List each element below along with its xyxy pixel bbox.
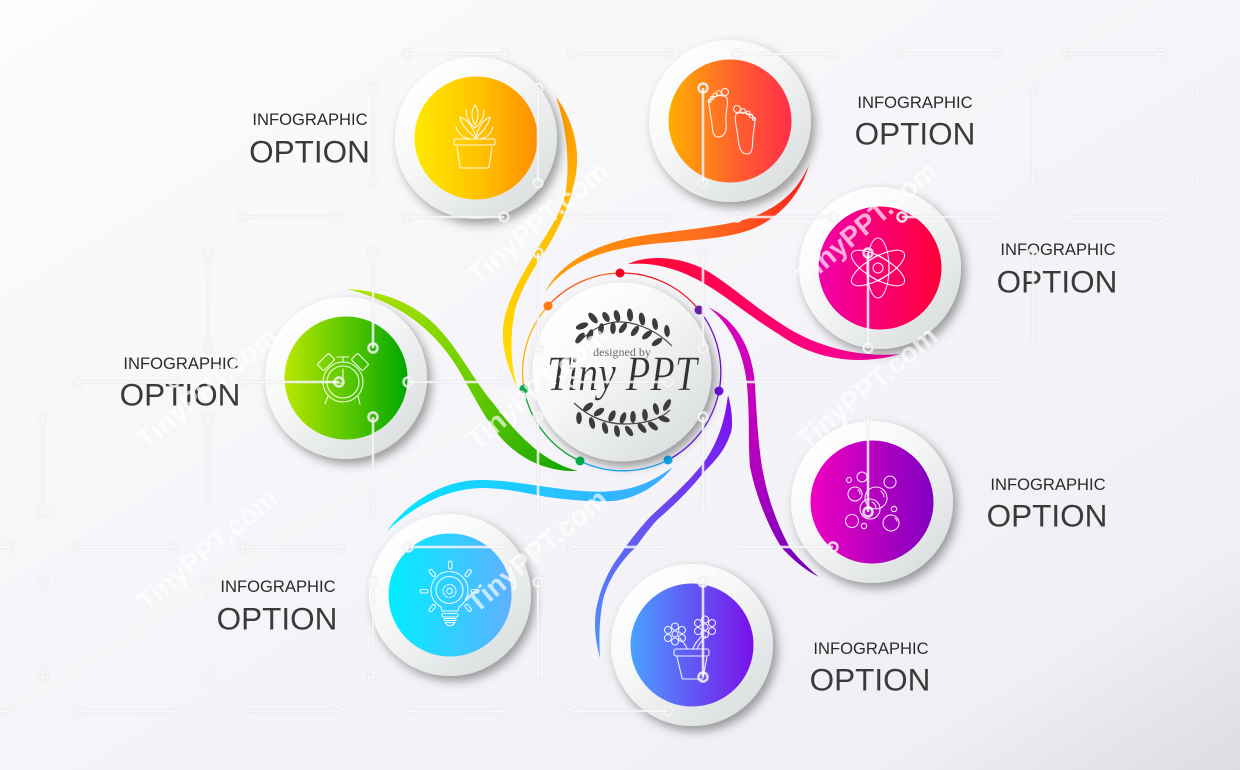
label: cyan <box>217 577 337 636</box>
icon: light bulb with gear <box>420 561 479 626</box>
logo: bottom laurel <box>574 398 673 438</box>
node: yellow plant <box>395 57 557 219</box>
label: green <box>120 354 240 412</box>
label: orange <box>855 93 975 152</box>
ribbon: pink <box>628 258 900 360</box>
label: yellow <box>249 110 370 170</box>
watermarks: TinyPPT.com <box>460 483 613 618</box>
logo: TinyPPT script: Tiny PPT <box>547 346 699 401</box>
ribbon: cyan <box>387 467 673 531</box>
watermarks: TinyPPT.com <box>461 155 614 290</box>
hub ring with dots <box>520 268 724 471</box>
label: green: INFOGRAPHIC <box>123 354 239 373</box>
label: yellow: OPTION <box>249 134 370 170</box>
watermarks: TinyPPT.com <box>460 320 613 455</box>
watermarks: TinyPPT.com <box>130 482 283 617</box>
watermarks: TinyPPT.com <box>130 320 283 455</box>
logo: top laurel <box>574 308 672 348</box>
label: purple: OPTION <box>987 498 1107 534</box>
icon: potted plant <box>454 105 495 168</box>
ribbon: violet <box>595 395 732 658</box>
label: pink <box>997 240 1117 300</box>
node: purple bubbles <box>791 421 953 583</box>
label: pink: OPTION <box>997 264 1117 300</box>
label: orange: INFOGRAPHIC <box>857 93 973 112</box>
icon: alarm clock <box>317 353 369 404</box>
ribbon: orange <box>545 165 809 292</box>
node: orange feet <box>649 40 811 202</box>
label: violet: INFOGRAPHIC <box>813 639 929 658</box>
label: purple: INFOGRAPHIC <box>990 475 1106 494</box>
ribbon: yellow <box>503 97 577 388</box>
ribbon: green <box>347 289 578 471</box>
label: purple <box>987 475 1107 534</box>
label: yellow: INFOGRAPHIC <box>252 110 368 129</box>
ribbon: purple <box>708 307 819 577</box>
node: cyan bulb <box>369 514 531 676</box>
icon: flower pot <box>664 616 716 679</box>
node: green clock <box>265 297 427 459</box>
watermarks: TinyPPT.com <box>790 155 943 290</box>
label: orange: OPTION <box>855 116 975 152</box>
watermarks: TinyPPT.com <box>790 320 943 455</box>
label: cyan: INFOGRAPHIC <box>220 577 336 596</box>
node: pink atom <box>799 187 961 349</box>
node: violet flowers <box>611 564 773 726</box>
label: violet: OPTION <box>810 662 930 698</box>
icon: footprints <box>708 88 755 154</box>
central disc with logo <box>532 282 712 462</box>
watermarks <box>130 155 943 618</box>
icon: bubbles <box>846 472 899 531</box>
label: green: OPTION <box>120 376 240 412</box>
label: pink: INFOGRAPHIC <box>1000 240 1116 259</box>
swirl ribbons <box>347 97 900 658</box>
label: violet <box>810 639 930 698</box>
logo: designed by: designed by <box>593 345 651 359</box>
icon: atom <box>847 238 909 298</box>
label: cyan: OPTION <box>217 600 337 636</box>
